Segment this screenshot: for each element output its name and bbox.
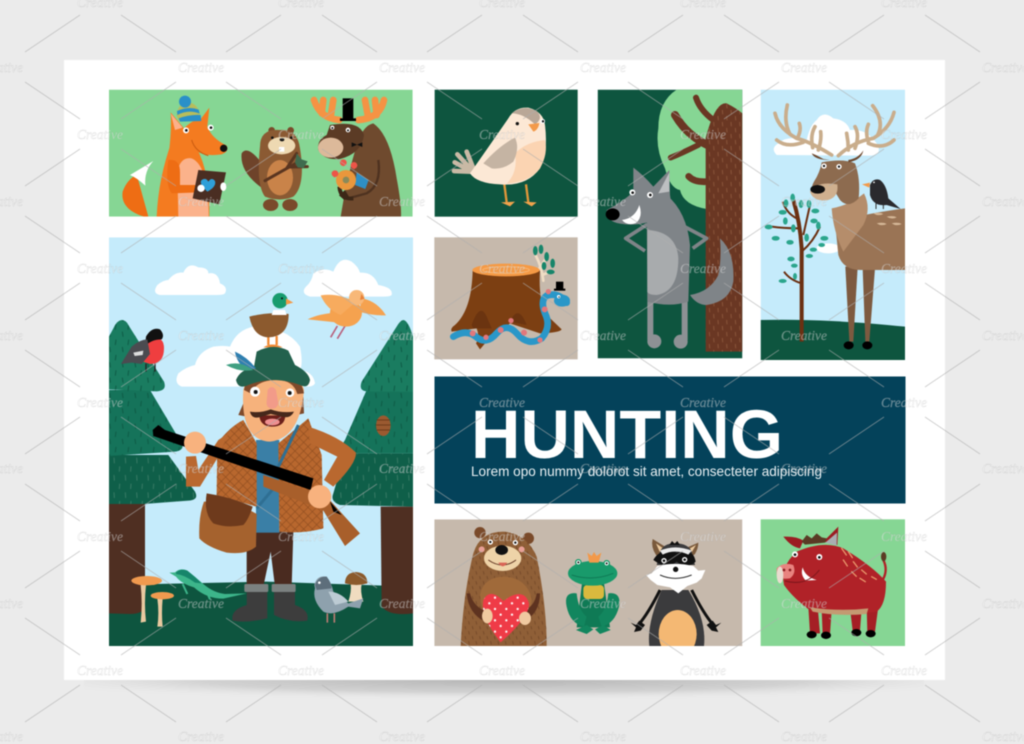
watermark text: Creative bbox=[379, 596, 425, 611]
snake bbox=[453, 282, 570, 343]
watermark text: Creative bbox=[178, 194, 224, 209]
panel: title banner bbox=[434, 376, 906, 504]
green tree crown bbox=[657, 90, 742, 212]
watermark text: Creative bbox=[77, 261, 123, 276]
watermark text: Creative bbox=[379, 60, 425, 75]
watermark text: Creative bbox=[580, 596, 626, 611]
ground bbox=[761, 320, 905, 360]
watermark text: Creative bbox=[479, 529, 525, 544]
mushrooms bbox=[131, 572, 367, 627]
tree trunk bbox=[671, 98, 742, 352]
watermark text: Creative bbox=[479, 261, 525, 276]
watermark text: Creative bbox=[278, 127, 324, 142]
beaver bbox=[241, 127, 308, 211]
watermark text: Creative bbox=[379, 328, 425, 343]
deer bbox=[810, 150, 905, 349]
watermark text: Creative bbox=[278, 261, 324, 276]
watermark text: Creative bbox=[680, 127, 726, 142]
watermark text: Creative bbox=[680, 529, 726, 544]
watermark text: Creative bbox=[781, 60, 827, 75]
watermark text: Creative bbox=[680, 395, 726, 410]
watermark text: Creative bbox=[379, 729, 425, 744]
bullfinch bbox=[121, 329, 164, 372]
card shadow bbox=[84, 680, 924, 714]
panel: bird bbox=[435, 90, 578, 217]
pigeon bbox=[314, 576, 363, 623]
sapling bbox=[533, 245, 555, 281]
watermark text: Creative bbox=[379, 194, 425, 209]
panel: hunter in forest bbox=[109, 237, 413, 646]
watermark text: Creative bbox=[479, 663, 525, 678]
left pine tree bbox=[109, 320, 196, 614]
watermark text: Creative bbox=[278, 395, 324, 410]
watermark text: Creative bbox=[178, 60, 224, 75]
watermark text: Creative bbox=[479, 127, 525, 142]
crow bbox=[862, 179, 901, 209]
watermark text: Creative bbox=[479, 395, 525, 410]
watermark text: Creative bbox=[178, 328, 224, 343]
watermark text: Creative bbox=[178, 596, 224, 611]
watermark text: Creative bbox=[781, 328, 827, 343]
hunter figure bbox=[153, 347, 360, 622]
watermark text: Creative bbox=[77, 529, 123, 544]
watermark text: Creative bbox=[580, 328, 626, 343]
panel: wild boar bbox=[761, 519, 905, 646]
panel: tree stump and snake bbox=[434, 237, 578, 359]
watermark text: Creative bbox=[781, 461, 827, 476]
watermark text: Creative bbox=[781, 194, 827, 209]
watermark text: Creative bbox=[77, 663, 123, 678]
watermark text: Creative bbox=[781, 729, 827, 744]
watermark text: Creative bbox=[580, 194, 626, 209]
boar bbox=[777, 527, 886, 639]
watermark text: Creative bbox=[379, 461, 425, 476]
watermark text: Creative bbox=[278, 529, 324, 544]
small cloud bbox=[817, 243, 840, 253]
watermark text: Creative bbox=[77, 395, 123, 410]
watermark text: Creative bbox=[881, 127, 927, 142]
orange bird bbox=[308, 290, 386, 339]
watermark text: Creative bbox=[77, 127, 123, 142]
lizard bbox=[169, 569, 247, 599]
watermark text: Creative bbox=[178, 729, 224, 744]
watermark text: Creative bbox=[278, 663, 324, 678]
watermark text: Creative bbox=[580, 60, 626, 75]
ground bbox=[109, 582, 413, 646]
subtitle: Lorem opo nummy dolorot sit amet, consecteter adipiscing bbox=[471, 463, 822, 479]
heading: HUNTING bbox=[471, 396, 783, 473]
watermark text: Creative bbox=[881, 663, 927, 678]
watermark text: Creative bbox=[680, 261, 726, 276]
mallard duck bbox=[249, 293, 293, 347]
panel: deer and crow bbox=[761, 90, 905, 360]
stump bbox=[451, 264, 562, 349]
fox bbox=[122, 96, 227, 217]
wolf bbox=[606, 168, 733, 349]
bear bbox=[461, 527, 547, 646]
cloud bbox=[774, 115, 879, 156]
watermark text: Creative bbox=[881, 529, 927, 544]
watermark text: Creative bbox=[580, 461, 626, 476]
white bird bbox=[454, 108, 546, 206]
panel: fox, beaver and moose bbox=[109, 90, 413, 217]
watermark text: Creative bbox=[680, 663, 726, 678]
antlers bbox=[775, 105, 894, 156]
white card bbox=[64, 60, 945, 680]
watermark text: Creative bbox=[781, 596, 827, 611]
frog bbox=[566, 552, 619, 634]
watermark text: Creative bbox=[580, 729, 626, 744]
panel: wolf and tree bbox=[598, 90, 742, 358]
watermark text: Creative bbox=[178, 461, 224, 476]
watermark text: Creative bbox=[881, 261, 927, 276]
right pine tree bbox=[332, 320, 413, 614]
watermark text: Creative bbox=[881, 395, 927, 410]
bare tree bbox=[765, 194, 828, 342]
moose bbox=[314, 98, 401, 217]
clouds bbox=[155, 260, 392, 387]
panel: bear, frog and raccoon bbox=[434, 519, 742, 658]
raccoon bbox=[631, 539, 721, 658]
